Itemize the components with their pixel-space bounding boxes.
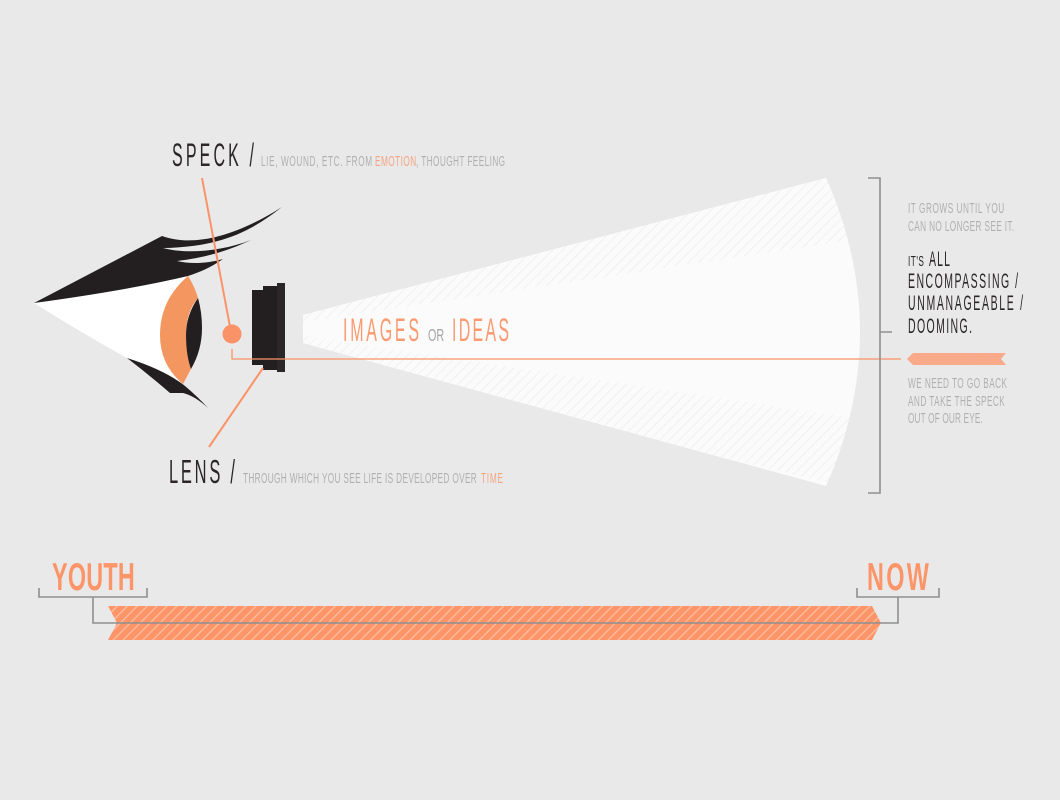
bracket (868, 178, 892, 493)
text block: all encompassing: ALL (929, 247, 950, 271)
heading: speck: SPECK / (172, 138, 255, 174)
text block: go back (908, 374, 1007, 427)
text block: all encompassing: DOOMING. (908, 314, 972, 338)
text block: all encompassing: IT'S (908, 252, 924, 270)
heading: speck: LIE, WOUND, ETC. FROM (261, 152, 372, 170)
text block: it grows: IT GROWS UNTIL YOU (908, 199, 1004, 217)
label: now: NOW (867, 555, 929, 598)
speck pointer line (202, 178, 231, 332)
text block: it grows: CAN NO LONGER SEE IT. (908, 217, 1014, 235)
text block: go back: WE NEED TO GO BACK (908, 374, 1007, 392)
light beam (303, 170, 860, 490)
text block: go back: AND TAKE THE SPECK (908, 392, 1005, 410)
icon: eye (34, 207, 282, 408)
heading: lens: THROUGH WHICH YOU SEE LIFE IS DEVELOPED OVER (243, 469, 477, 487)
heading: lens: LENS / (169, 453, 235, 491)
heading: speck: EMOTION (375, 152, 416, 170)
text block: go back: OUT OF OUR EYE. (908, 409, 983, 427)
icon: lens (252, 283, 285, 372)
speck dot (222, 324, 242, 344)
heading: lens (169, 453, 503, 491)
beam label: images or ideas: IMAGES (343, 313, 419, 349)
lens pointer line (209, 368, 263, 447)
text block: all encompassing: ENCOMPASSING / (908, 269, 1018, 293)
heading: lens: TIME (481, 469, 503, 487)
beam label: images or ideas: OR (428, 326, 444, 346)
text block: all encompassing: UNMANAGEABLE / (908, 291, 1023, 315)
text block: all encompassing (908, 247, 1023, 338)
text block: it grows (908, 199, 1014, 235)
beam label: images or ideas: IDEAS (452, 313, 509, 349)
heading: speck (172, 138, 505, 174)
sight line (232, 349, 901, 359)
heading: speck: , THOUGHT FEELING (416, 152, 505, 170)
small ribbon (907, 353, 1006, 365)
beam label: images or ideas (343, 313, 509, 349)
label: youth: YOUTH (52, 555, 135, 598)
timeline ribbon (108, 606, 881, 640)
timeline connector (39, 588, 939, 623)
